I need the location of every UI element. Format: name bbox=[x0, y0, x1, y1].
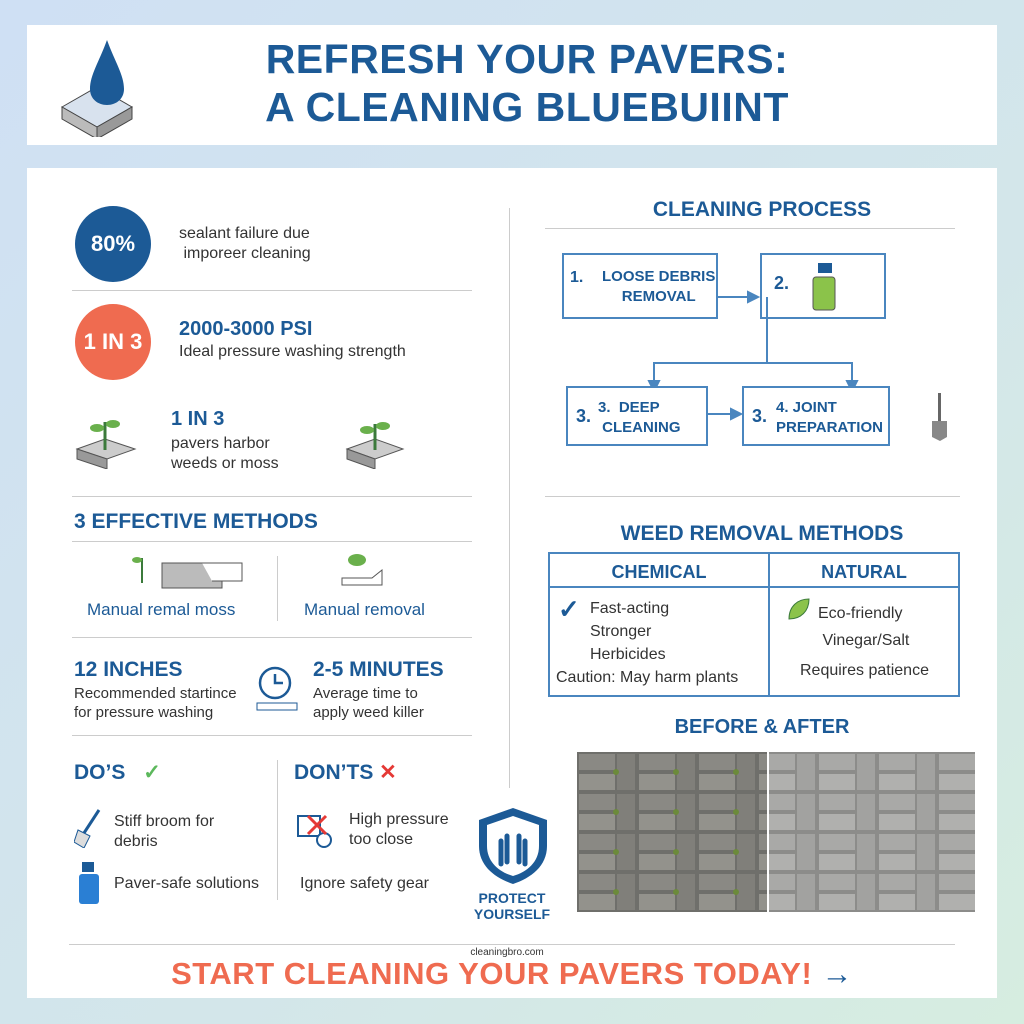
do's: Paver-safe solutions bbox=[114, 875, 259, 892]
do's: DO’S ✓ bbox=[74, 761, 161, 784]
stat: weeds bbox=[76, 408, 404, 472]
title: A CLEANING BLUEBUIINT bbox=[265, 84, 789, 130]
flowchart: cleaning process: 1. bbox=[570, 269, 583, 286]
stat: 12 inches: Recommended startince bbox=[74, 685, 237, 702]
icon: protect yourself shield: YOURSELF bbox=[474, 906, 550, 922]
don'ts: DON’TS ✕ bbox=[294, 761, 397, 784]
flowchart: cleaning process: 4. JOINT bbox=[776, 399, 837, 416]
stat: 1 in 3 psi: 1 IN 3 bbox=[84, 329, 142, 354]
stat: 2-5 minutes bbox=[313, 658, 444, 721]
icon: water drop on paver bbox=[61, 40, 133, 137]
do's: debris bbox=[114, 833, 158, 850]
icon: protect yourself shield: PROTECT bbox=[479, 890, 545, 906]
stat: 80%: 80% bbox=[91, 231, 135, 256]
don'ts bbox=[294, 761, 449, 892]
flowchart: cleaning process: REMOVAL bbox=[622, 288, 696, 305]
heading: weed removal methods: WEED REMOVAL METHODS bbox=[621, 522, 903, 545]
table: chemical vs natural: Herbicides bbox=[590, 646, 666, 663]
table: chemical vs natural: Stronger bbox=[590, 623, 651, 640]
table: chemical vs natural: ✓ bbox=[558, 594, 580, 624]
stat: 12 inches bbox=[74, 658, 237, 721]
title: REFRESH YOUR PAVERS: bbox=[266, 36, 788, 82]
don'ts: too close bbox=[349, 831, 413, 848]
stat: weeds: weeds or moss bbox=[171, 455, 279, 472]
flowchart: cleaning process: LOOSE DEBRIS bbox=[602, 268, 715, 285]
stat: 12 inches: for pressure washing bbox=[74, 704, 213, 721]
heading: before & after: BEFORE & AFTER bbox=[675, 716, 849, 738]
stat: 1 in 3 psi: 2000-3000 PSI bbox=[179, 318, 312, 340]
heading: cleaning process: CLEANING PROCESS bbox=[653, 198, 871, 221]
table: chemical vs natural: Vinegar/Salt bbox=[822, 632, 909, 649]
heading: 3 effective methods: 3 EFFECTIVE METHODS bbox=[74, 510, 318, 533]
do's bbox=[74, 761, 259, 904]
table: chemical vs natural: Eco-friendly bbox=[818, 605, 902, 622]
flowchart: cleaning process: 3. DEEP bbox=[598, 399, 660, 416]
main panel bbox=[27, 168, 997, 998]
table: chemical vs natural: CHEMICAL bbox=[612, 562, 706, 582]
table: chemical vs natural: Caution: May harm plants bbox=[556, 669, 738, 686]
stat: 80%: imporeer cleaning bbox=[183, 245, 311, 262]
don'ts: High pressure bbox=[349, 811, 449, 828]
flowchart: cleaning process: PREPARATION bbox=[776, 419, 883, 436]
stat: 2-5 minutes: Average time to bbox=[313, 685, 418, 702]
photo: before & after pavers bbox=[577, 752, 975, 912]
icon: clock bbox=[256, 666, 298, 710]
table: chemical vs natural: NATURAL bbox=[821, 562, 907, 582]
icon: protect yourself shield bbox=[474, 808, 550, 922]
stat: 80%: sealant failure due bbox=[179, 225, 310, 242]
stat: 2-5 minutes: 2-5 MINUTES bbox=[313, 658, 444, 681]
stat: weeds: pavers harbor bbox=[171, 435, 270, 452]
stat: weeds: 1 IN 3 bbox=[171, 408, 224, 430]
stat: 12 inches: 12 INCHES bbox=[74, 658, 183, 681]
stat: 1 in 3 psi bbox=[75, 304, 406, 380]
flowchart: cleaning process: 2. bbox=[774, 273, 789, 293]
footer url: cleaningbro.com bbox=[470, 947, 544, 958]
table: chemical vs natural: Requires patience bbox=[800, 662, 929, 679]
stat: 2-5 minutes: apply weed killer bbox=[313, 704, 424, 721]
flowchart: cleaning process: 3. bbox=[576, 406, 591, 426]
stat: 80% bbox=[75, 206, 311, 282]
don'ts: Ignore safety gear bbox=[300, 875, 429, 892]
header panel bbox=[27, 25, 997, 145]
table: chemical vs natural bbox=[548, 552, 960, 697]
methods row bbox=[87, 554, 425, 621]
flowchart: cleaning process bbox=[562, 253, 947, 446]
flowchart: cleaning process: CLEANING bbox=[602, 419, 680, 436]
methods row: Manual removal bbox=[304, 600, 425, 619]
table: chemical vs natural: Fast-acting bbox=[590, 600, 669, 617]
flowchart: cleaning process: 3. bbox=[752, 406, 767, 426]
stat: 1 in 3 psi: Ideal pressure washing strength bbox=[179, 343, 406, 360]
title bbox=[265, 36, 789, 130]
call to action: START CLEANING YOUR PAVERS TODAY! → bbox=[171, 956, 853, 991]
methods row: Manual remal moss bbox=[87, 600, 235, 619]
do's: Stiff broom for bbox=[114, 813, 214, 830]
